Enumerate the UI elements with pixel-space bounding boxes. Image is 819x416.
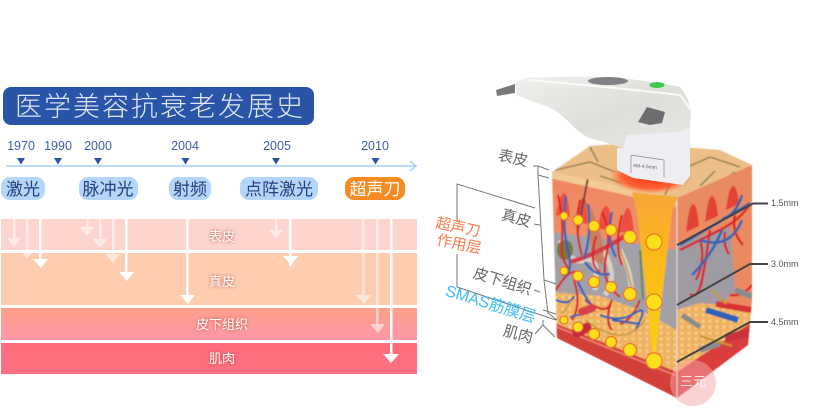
layer labels: 真皮 [499,206,533,231]
ultrasound focus cone [632,192,678,366]
year labels and markers: 1970 [7,139,35,153]
ultrasound action layer label: 超声刀 [434,214,482,241]
layer labels: 皮下组织 [471,265,533,299]
technology pills: 点阵激光 [245,180,313,199]
side grip [638,107,665,125]
year labels and markers: 2004 [171,139,199,153]
band labels: 皮下组织 [196,317,248,332]
SMAS fascia label: SMAS筋膜层 [443,282,538,326]
depth callouts: 1.5mm [771,198,799,208]
red contact glow [609,158,693,194]
watermark: 三元 [680,374,706,389]
ultrasound device [496,77,693,194]
left face [551,172,678,398]
transducer head [617,128,690,185]
year labels and markers: 2010 [361,139,389,153]
layer labels [471,147,535,347]
layer labels: 肌肉 [501,323,535,347]
head marking: 4M-4.5mm [633,163,657,171]
depth callouts: 4.5mm [771,317,799,327]
technology pills: 射频 [173,180,207,199]
annotation lines [457,166,557,337]
band labels: 肌肉 [209,351,235,366]
year labels and markers: 1990 [44,139,72,153]
technology pills: 脉冲光 [82,180,134,199]
vessels left face [556,195,640,330]
year labels and markers: 2005 [263,139,291,153]
skin layer bands [1,219,417,374]
technology pills [1,177,405,200]
timeline [6,139,416,171]
handle body [515,77,691,148]
focal points [560,212,662,369]
technology pills: 超声刀 [350,180,400,199]
papillae [556,193,634,234]
depth callouts [677,198,799,362]
year labels and markers [7,139,389,164]
skin cross-section block [552,143,757,400]
front corner highlight [676,198,678,398]
depth callouts: 3.0mm [771,259,799,269]
year labels and markers: 2000 [84,139,112,153]
penetration depth arrows [7,218,399,363]
band labels: 表皮 [209,229,235,244]
ultrasound action layer label [434,214,483,258]
title banner: 医学美容抗衰老发展史 [15,92,305,122]
grey button [588,77,628,85]
right face [677,160,757,400]
band labels [196,229,248,366]
technology pills: 激光 [6,180,40,199]
layer labels: 表皮 [496,147,529,170]
band labels: 真皮 [209,274,235,289]
timeline axis arrow [6,161,416,171]
watermark [670,360,716,406]
power light [650,82,664,88]
nose tip [496,84,515,96]
top surface [552,143,752,198]
head marking [631,155,664,178]
ultrasound action layer label: 作用层 [435,232,483,258]
